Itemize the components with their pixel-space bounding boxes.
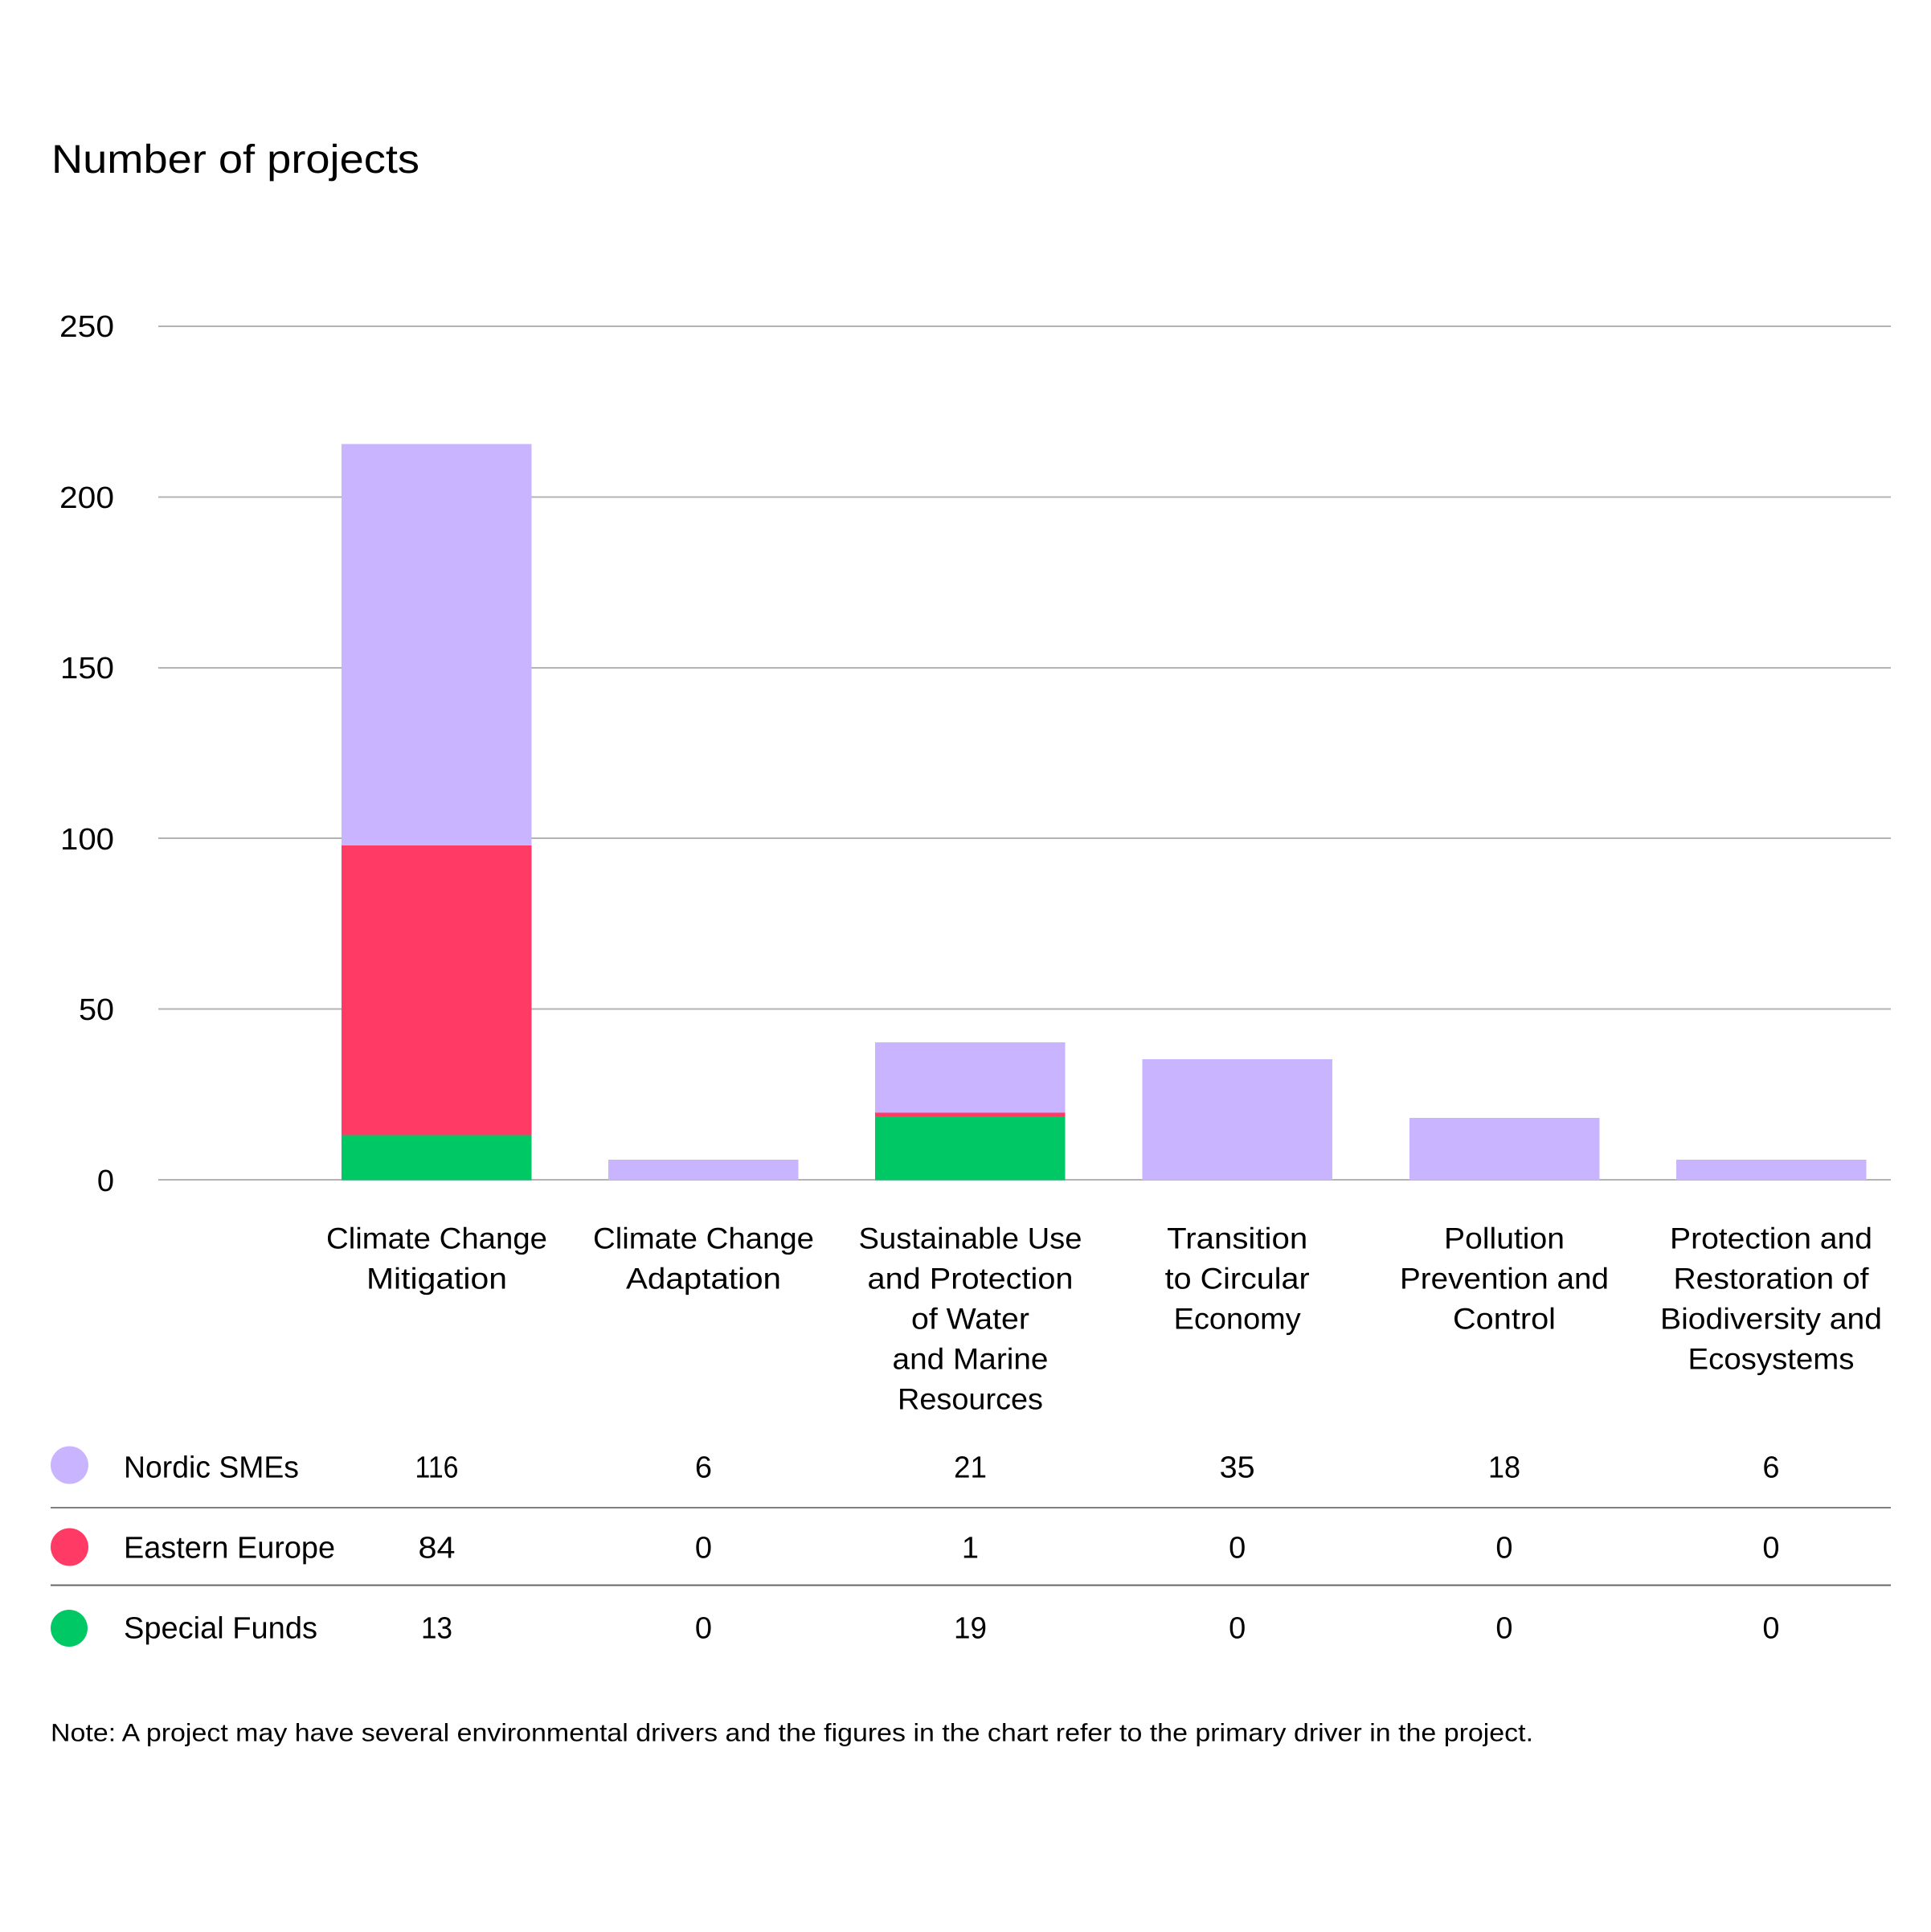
category labels: and Protection xyxy=(868,1262,1074,1296)
y-axis labels: 200 xyxy=(59,481,114,515)
row: Nordic SMEs: 116 xyxy=(415,1451,458,1484)
category labels: Climate Change xyxy=(593,1222,814,1255)
category labels: Climate Change xyxy=(326,1222,547,1255)
row: Eastern Europe: 1 xyxy=(962,1531,979,1565)
row: Eastern Europe xyxy=(51,1529,1780,1566)
bar: Pollution Prevention and Control xyxy=(1409,1118,1599,1180)
bar: Sustainable Use xyxy=(875,1042,1066,1180)
category labels: Pollution xyxy=(1444,1222,1565,1255)
category labels: Sustainable Use xyxy=(858,1222,1082,1255)
y-axis labels: 150 xyxy=(60,652,114,686)
title: Number of projects xyxy=(51,137,419,182)
row: Nordic SMEs: 21 xyxy=(954,1451,987,1484)
row: Eastern Europe: 0 xyxy=(695,1531,712,1565)
row: Special Funds: 19 xyxy=(954,1611,987,1645)
bar chart xyxy=(59,310,1891,1198)
row: Eastern Europe: Eastern Europe xyxy=(124,1531,335,1565)
row: Special Funds xyxy=(51,1610,1780,1647)
row: Nordic SMEs: 18 xyxy=(1488,1451,1520,1484)
row: Eastern Europe: 0 xyxy=(1229,1531,1246,1565)
category labels: of Water xyxy=(911,1302,1029,1336)
category labels: Mitigation xyxy=(366,1262,507,1296)
row: Nordic SMEs: 6 xyxy=(695,1451,712,1484)
bar: Climate Change Mitigation xyxy=(342,444,532,1180)
bar: Climate Change Adaptation xyxy=(608,1160,799,1180)
category labels: Ecosystems xyxy=(1688,1342,1855,1376)
category labels: Restoration of xyxy=(1673,1262,1869,1296)
category labels: to Circular xyxy=(1165,1262,1310,1296)
y-axis labels xyxy=(59,310,114,1198)
category labels: Protection and xyxy=(1670,1222,1872,1255)
note: Note: A project may have several environmental drivers and the figures in the chart refer to the primary driver in the project. xyxy=(51,1719,1533,1747)
row: Special Funds: 0 xyxy=(1762,1611,1780,1645)
row: Special Funds: 0 xyxy=(1229,1611,1246,1645)
row: Special Funds: Special Funds xyxy=(124,1611,317,1645)
bar: Protection and Restoration xyxy=(1676,1160,1866,1180)
category labels: and Marine xyxy=(892,1342,1048,1376)
row: Nordic SMEs xyxy=(51,1447,1780,1484)
row: Special Funds: 0 xyxy=(1495,1611,1513,1645)
category labels: Control xyxy=(1453,1302,1556,1336)
category labels: Resources xyxy=(898,1382,1043,1416)
category labels xyxy=(326,1222,1882,1416)
category labels: Transition xyxy=(1167,1222,1307,1255)
y-axis labels: 250 xyxy=(59,310,114,344)
row: Nordic SMEs: 35 xyxy=(1220,1451,1255,1484)
y-axis labels: 0 xyxy=(97,1165,114,1198)
category labels: Economy xyxy=(1174,1302,1301,1336)
row: Eastern Europe: 0 xyxy=(1762,1531,1780,1565)
row: Nordic SMEs: Nordic SMEs xyxy=(124,1451,299,1484)
row: Nordic SMEs: 6 xyxy=(1762,1451,1780,1484)
row: Special Funds: 0 xyxy=(695,1611,712,1645)
row: Eastern Europe: 84 xyxy=(418,1531,455,1565)
category labels: Prevention and xyxy=(1400,1262,1609,1296)
data table xyxy=(51,1447,1891,1647)
row: Eastern Europe: 0 xyxy=(1495,1531,1513,1565)
y-axis labels: 100 xyxy=(60,823,114,857)
row: Special Funds: 13 xyxy=(421,1611,452,1645)
y-axis labels: 50 xyxy=(79,993,114,1027)
category labels: Adaptation xyxy=(626,1262,781,1296)
bar: Transition to Circular Economy xyxy=(1143,1059,1332,1180)
category labels: Biodiversity and xyxy=(1660,1302,1882,1336)
